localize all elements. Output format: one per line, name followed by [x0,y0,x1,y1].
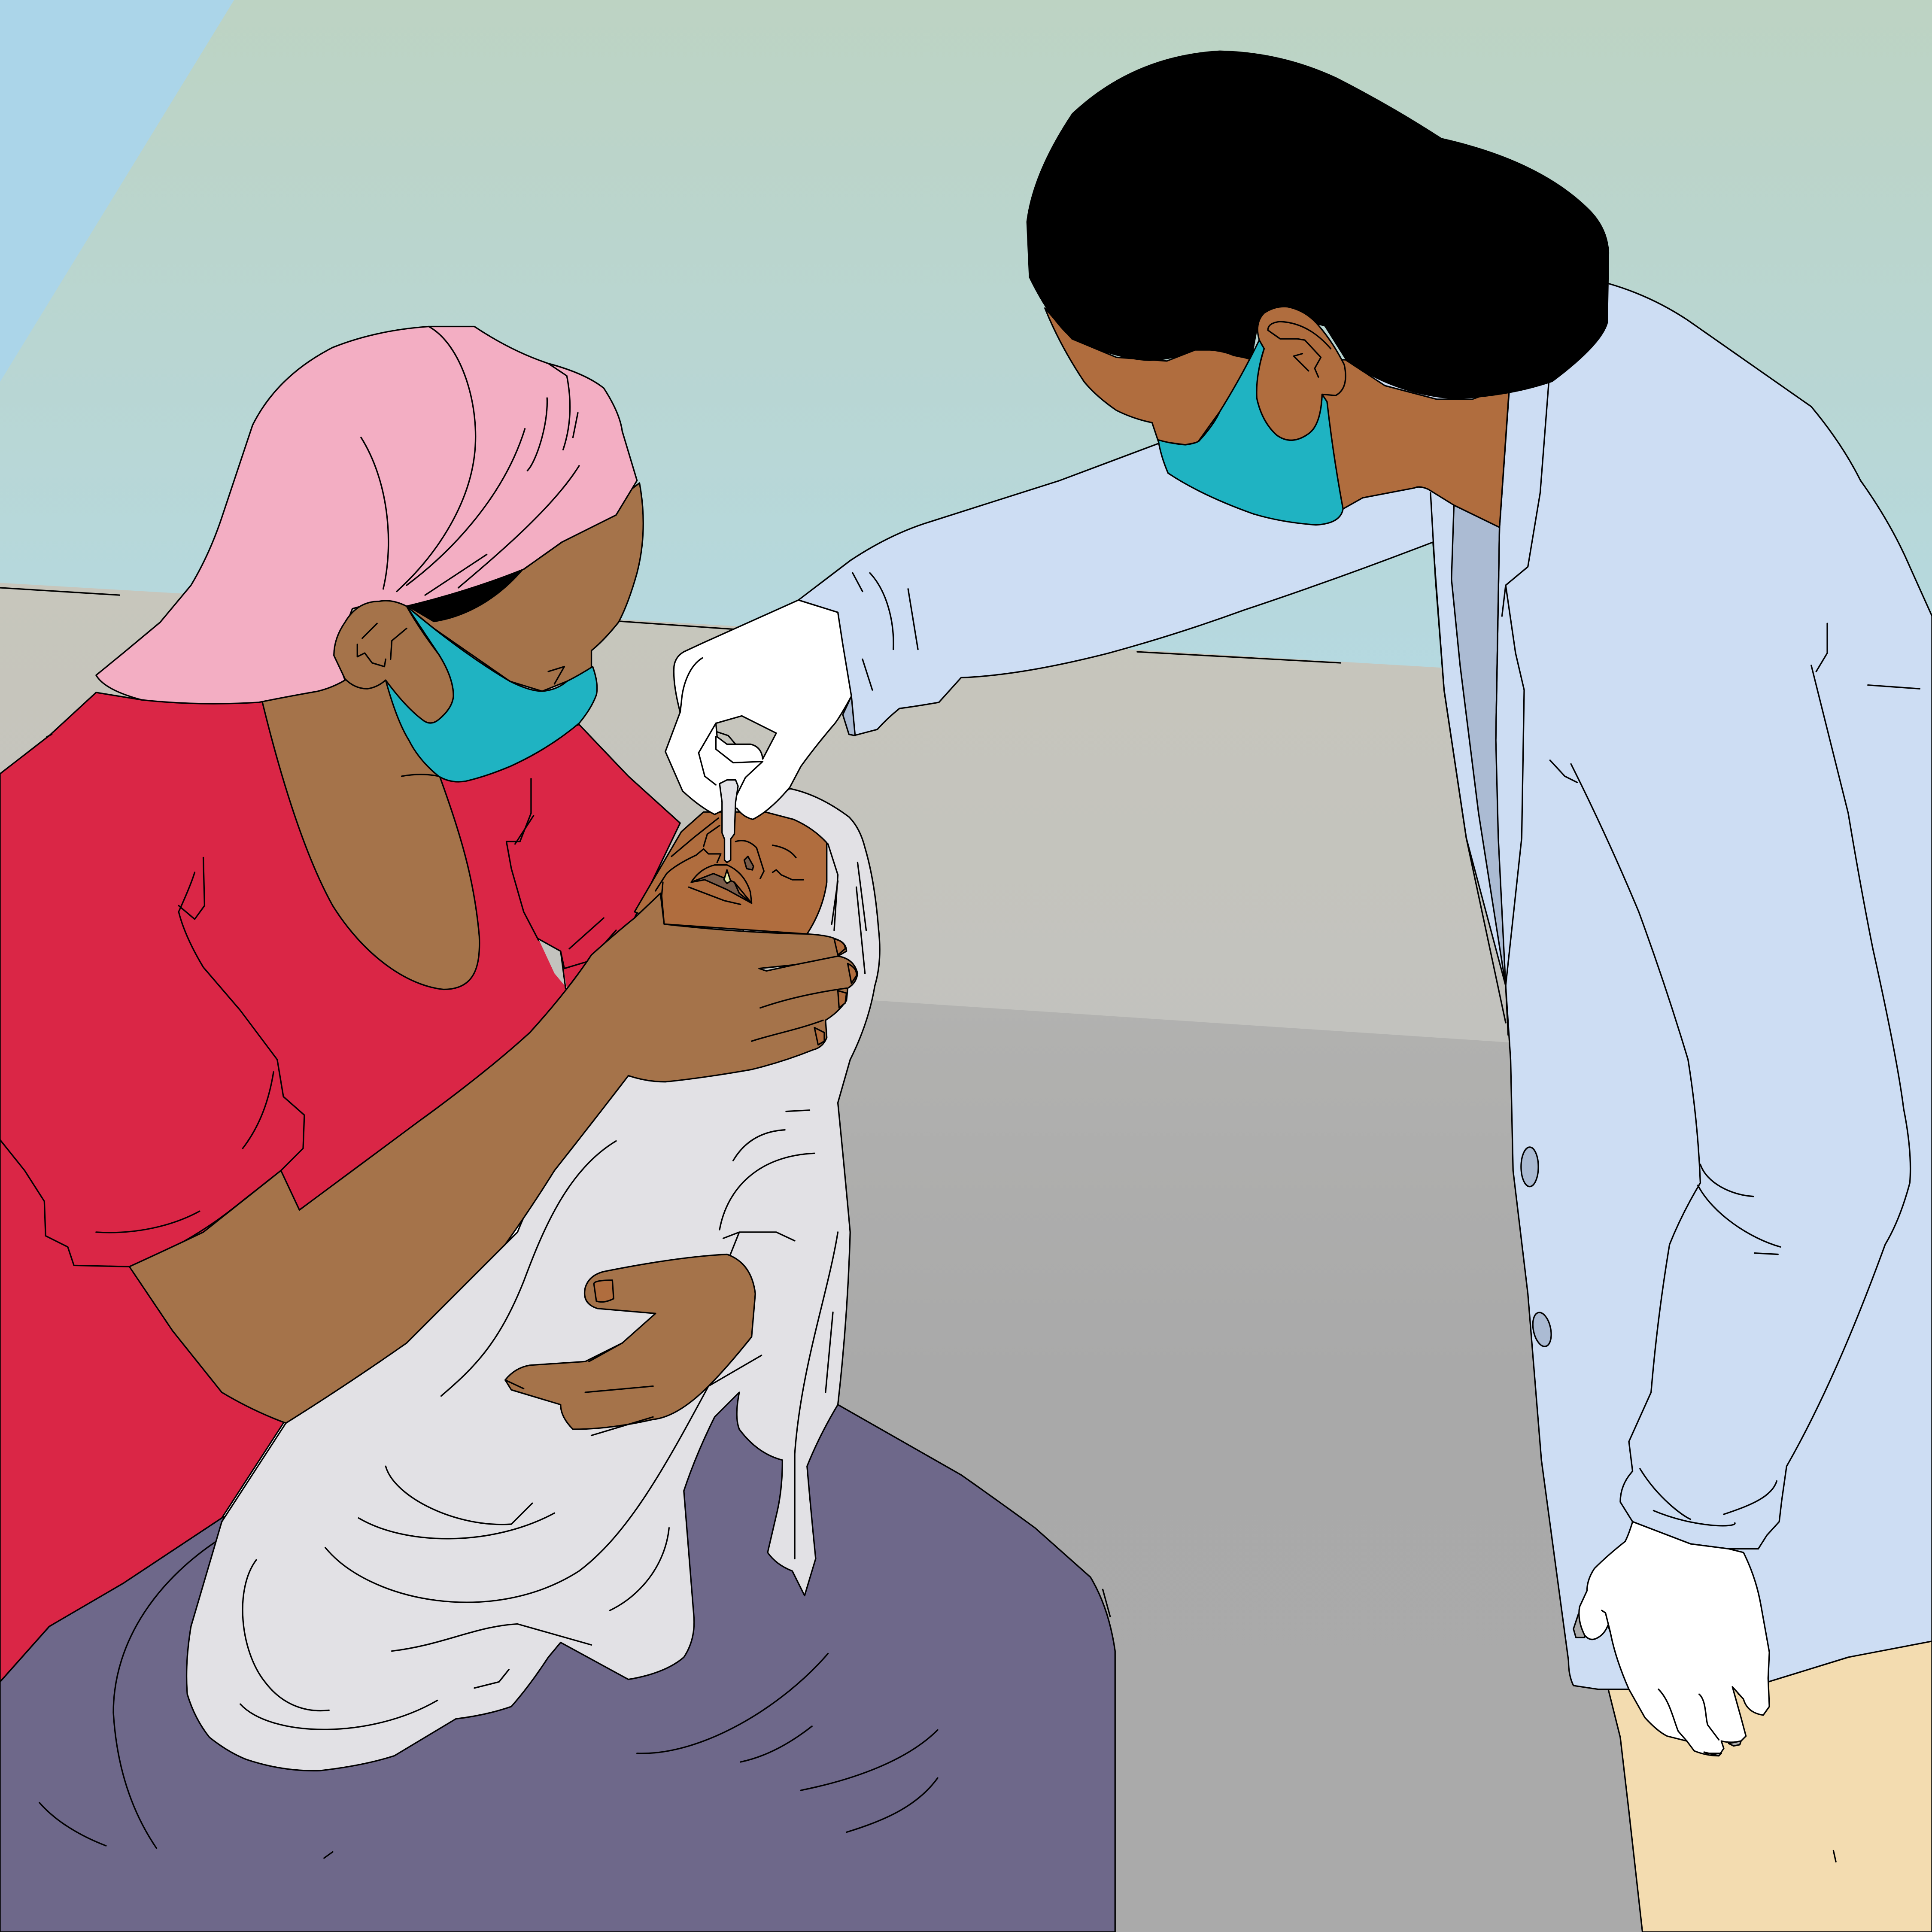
fingernail [1732,1680,1738,1694]
fingertip details [1704,1752,1721,1756]
coat seams and folds [853,382,1920,1862]
face mask [386,606,597,782]
thumbnail [1574,1614,1586,1637]
background: wall [0,0,1932,690]
headscarf folds [361,327,579,595]
face [407,483,643,691]
background: back wall and floor [0,583,1651,1932]
mother's arm and hand cradling the baby's head [129,893,857,1423]
cuff shadow [843,696,855,735]
glove [1579,1522,1769,1756]
nurse's gloved hand holding the dropper [665,600,851,863]
baby's mouth [691,865,752,903]
vaccine drop [724,870,731,884]
baby's nostril [744,857,753,870]
nurse's hair [1027,51,1609,399]
blanket folds [240,823,866,1729]
ear and ear loop [334,601,453,723]
mother's neck and chest [261,653,480,990]
nurse's lower gloved hand [1574,1522,1769,1756]
gap between fingers [759,965,795,971]
nurse's neck and face [1045,308,1510,527]
dress folds [0,734,616,1267]
mother's red dress [0,693,680,1682]
pink headscarf [96,327,637,704]
nurse's legs [1608,1639,1932,1932]
nurse's ear [1257,307,1346,440]
mother's head [96,327,643,782]
nurse's face mask [1158,340,1343,525]
baby's features [656,818,803,924]
finger lines [752,956,847,1041]
baby wrapped in white blanket [187,789,880,1771]
mother's lower hand holding the baby [505,1255,755,1435]
fingernails [834,939,845,955]
dropper tip [720,780,738,863]
coat buttons [1521,1147,1554,1348]
hair under scarf [407,569,524,622]
lapel lining [1452,505,1506,986]
nurse's lab coat [799,283,1932,1862]
mother's lap: purple skirt [0,1390,1115,1932]
baby's face [635,812,827,934]
